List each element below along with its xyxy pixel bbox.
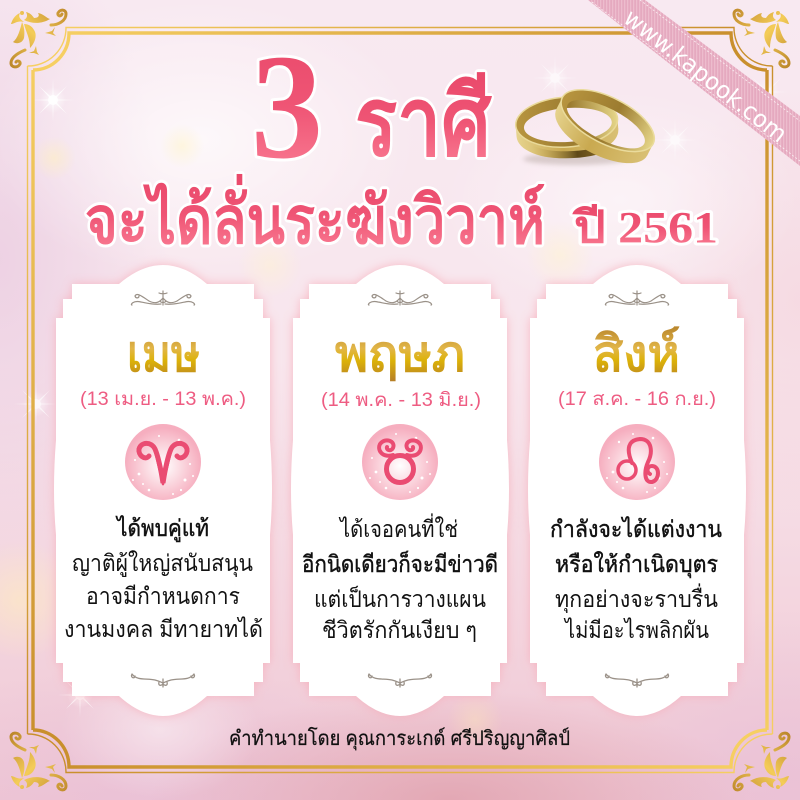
title bbox=[85, 24, 718, 258]
panel: Aries bbox=[54, 265, 272, 716]
dates: (17 ส.ค. - 16 ก.ย.) bbox=[558, 389, 716, 410]
corner ornament: bottom left bbox=[11, 733, 66, 790]
description: งานมงคล มีทายาทได้ bbox=[64, 616, 263, 642]
corner ornament: bottom right bbox=[734, 733, 789, 790]
ornament: bottom flourish bbox=[369, 674, 431, 687]
icon: Taurus sign bbox=[362, 424, 438, 500]
dates: (13 เม.ย. - 13 พ.ค.) bbox=[80, 389, 246, 410]
heading: พฤษภ: พฤษภ bbox=[335, 326, 465, 382]
ribbon: www.kapook.com: www.kapook.com bbox=[618, 4, 792, 148]
icon: Leo sign bbox=[599, 424, 675, 500]
description: ไม่มีอะไรพลิกผัน bbox=[563, 617, 709, 643]
title: จะได้ลั่นระฆังวิวาห์ bbox=[85, 173, 545, 258]
panel: Leo bbox=[528, 265, 746, 716]
panel: Taurus bbox=[291, 265, 509, 716]
description: ทุกอย่างจะราบรื่น bbox=[555, 583, 718, 613]
ornament: top flourish bbox=[368, 291, 432, 305]
ornament: top flourish bbox=[605, 291, 669, 305]
ornament: bottom flourish bbox=[132, 674, 194, 687]
description: ได้พบคู่แท้ bbox=[115, 515, 209, 542]
corner ornament: top left bbox=[11, 10, 66, 67]
description: ญาติผู้ใหญ่สนับสนุน bbox=[72, 550, 253, 577]
title: ราศี bbox=[355, 69, 493, 176]
icon: Aries sign bbox=[125, 424, 201, 500]
description bbox=[64, 515, 263, 642]
description: หรือให้กำเนิดบุตร bbox=[555, 551, 718, 578]
description: ชีวิตรักกันเงียบ ๆ bbox=[322, 617, 477, 643]
description: แต่เป็นการวางแผน bbox=[314, 584, 486, 612]
title: ปี 2561 bbox=[571, 203, 718, 252]
description: อีกนิดเดียวก็จะมีข่าวดี bbox=[302, 549, 498, 577]
title: 3 bbox=[251, 24, 323, 190]
footer credit: คำทำนายโดย คุณการะเกด์ ศรีปริญญาศิลป์ bbox=[229, 727, 570, 751]
description: อาจมีกำหนดการ bbox=[86, 583, 240, 609]
dates: (14 พ.ค. - 13 มิ.ย.) bbox=[321, 390, 481, 411]
heading: สิงห์: สิงห์ bbox=[593, 326, 680, 382]
icon: wedding rings bbox=[515, 89, 656, 167]
description bbox=[302, 513, 498, 643]
corner ornament: top right bbox=[734, 10, 789, 67]
ornament: bottom flourish bbox=[606, 674, 668, 687]
ornament: top flourish bbox=[131, 291, 195, 305]
heading: เมษ: เมษ bbox=[127, 326, 200, 382]
description: ได้เจอคนที่ใช่ bbox=[338, 513, 458, 542]
description: กำลังจะได้แต่งงาน bbox=[550, 516, 722, 542]
description bbox=[550, 516, 722, 643]
